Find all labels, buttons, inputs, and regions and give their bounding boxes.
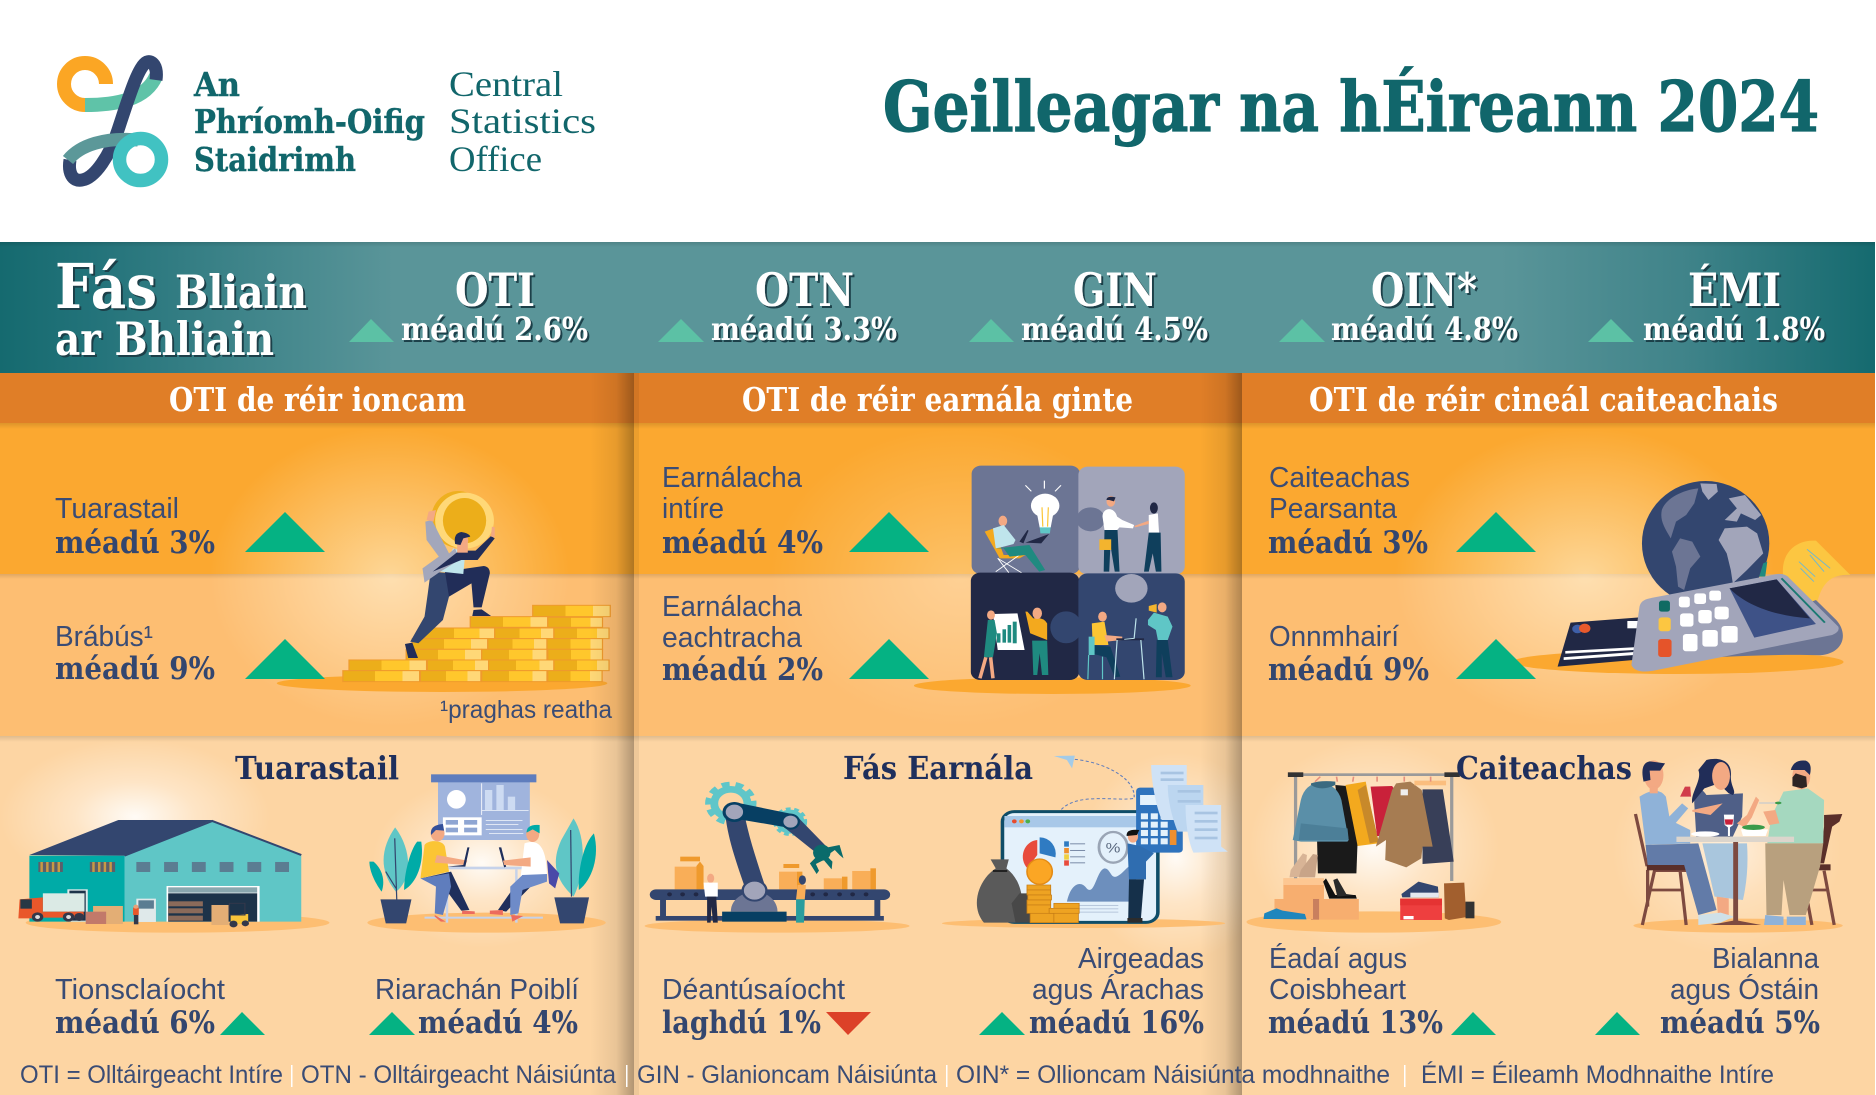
- illustration: man carrying a coin up stacked coins: [277, 491, 610, 692]
- panel: OTI by income: [0, 373, 634, 1095]
- metric: ÉMI: ÉMI: [1688, 262, 1781, 317]
- heading: Fás Bliain ar Bhliain: ar Bhliain: [55, 312, 274, 366]
- footer: abbreviation legend: OIN* = Ollioncam Náisiúnta modhnaithe: [956, 1061, 1390, 1089]
- metric: OTI: méadú 2.6%: [401, 310, 588, 348]
- metric: clothing and footwear: Éadaí agus: [1269, 942, 1407, 975]
- metric: clothing and footwear: méadú 13%: [1268, 1005, 1443, 1041]
- metric: domestic sectors: [662, 466, 929, 554]
- metric: wages: méadú 3%: [55, 525, 215, 561]
- heading: sector growth: Fás Earnála: [843, 749, 1033, 787]
- logo text: Irish name: An: [193, 65, 240, 104]
- metric: personal consumption: [1268, 466, 1536, 554]
- illustration: clothes rail with shoes: [1246, 772, 1501, 933]
- illustration: financial dashboard and coins: [942, 756, 1228, 928]
- logo text: Irish name: Phríomh-Oifig: [194, 102, 425, 141]
- heading: Fás Bliain ar Bhliain: Bliain: [175, 265, 307, 319]
- illustration: globe and card payment terminal: [1513, 481, 1850, 674]
- heading: wages: Tuarastail: [235, 749, 399, 787]
- metric: restaurants and hotels: agus Óstáin: [1670, 973, 1819, 1006]
- shadow toward next column: [1210, 373, 1242, 1095]
- metric: manufacturing: laghdú 1%: [662, 1005, 821, 1041]
- metric: restaurants and hotels: méadú 5%: [1660, 1005, 1820, 1041]
- sub-element: idea bulb: [1025, 481, 1061, 533]
- metric: public administration: méadú 4%: [418, 1005, 578, 1041]
- footer: abbreviation legend: OTN - Olltáirgeacht Náisiúnta: [301, 1061, 616, 1089]
- sub-element: workers: [704, 874, 806, 923]
- metric: GIN: GIN: [1073, 263, 1157, 317]
- metric: domestic sectors: méadú 4%: [662, 525, 823, 561]
- heading: OTI by sector: OTI de réir earnála ginte: [742, 380, 1133, 419]
- metric: clothing and footwear: Coisbheart: [1269, 974, 1406, 1006]
- metric: manufacturing: Déantúsaíocht: [662, 974, 845, 1006]
- illustration: factory warehouse: [18, 820, 329, 933]
- logo text: Irish name: [193, 65, 425, 179]
- metric: finance and insurance: agus Árachas: [1032, 973, 1204, 1006]
- illustration: robot arm and conveyor: [645, 784, 910, 933]
- metric: personal consumption: Pearsanta: [1269, 493, 1398, 525]
- metric: ÉMI: méadú 1.8%: [1643, 310, 1825, 348]
- metric: OIN: méadú 4.8%: [1331, 310, 1518, 348]
- illustration: financial dashboard and coins: %: [1106, 841, 1121, 856]
- shadow toward next column: [601, 373, 634, 1095]
- metric: personal consumption: Caiteachas: [1269, 462, 1410, 494]
- metric: external sectors: méadú 2%: [662, 652, 823, 688]
- footer: abbreviation legend: GIN - Glanioncam Náisiúnta: [637, 1061, 937, 1089]
- footnote: ¹praghas reatha: [440, 696, 612, 724]
- metric: OTI: [349, 263, 588, 348]
- metric: surplus: Brábús¹: [55, 621, 153, 653]
- metric: industry: Tionsclaíocht: [55, 974, 225, 1006]
- metric: finance and insurance: [979, 947, 1204, 1035]
- header: [64, 62, 1819, 180]
- metric: exports: [1268, 624, 1536, 680]
- metric: surplus: [56, 624, 325, 680]
- metric: exports: méadú 9%: [1268, 652, 1429, 688]
- heading: Fás Bliain ar Bhliain: Fás: [55, 250, 157, 323]
- metric: public administration: [369, 978, 579, 1035]
- metric: industry: méadú 6%: [55, 1005, 215, 1041]
- metric: surplus: méadú 9%: [55, 651, 215, 687]
- metric: OTN: [658, 263, 897, 348]
- metric: OIN: [1279, 263, 1518, 348]
- heading: expenditure: Caiteachas: [1456, 749, 1632, 787]
- metric: OTN: méadú 3.3%: [711, 310, 897, 348]
- metric: domestic sectors: intíre: [662, 493, 724, 525]
- footer: abbreviation legend: OTI = Olltáirgeacht Intíre: [20, 1061, 283, 1089]
- sub-element: chairs: [1635, 814, 1842, 925]
- heading: OTI by expenditure: OTI de réir cineál caiteachais: [1309, 380, 1778, 419]
- panel: OTI by sector: [634, 373, 1271, 1095]
- metric: industry: [56, 978, 265, 1035]
- metric: OIN: OIN*: [1371, 263, 1477, 317]
- metric: GIN: [969, 263, 1208, 348]
- metric: OTN: OTN: [755, 263, 854, 317]
- metric: wages: [56, 497, 325, 554]
- logo text: English name: Statistics: [449, 101, 596, 141]
- metric: ÉMI: [1588, 262, 1825, 348]
- metric: external sectors: [662, 594, 929, 680]
- metric: restaurants and hotels: Bialanna: [1712, 943, 1820, 975]
- metric: domestic sectors: Earnálacha: [662, 462, 803, 494]
- illustration: two workers at a table with plants: [367, 774, 606, 933]
- metric: clothing and footwear: [1268, 942, 1496, 1041]
- footer: abbreviation legend: ÉMI = Éileamh Modhnaithe Intíre: [1421, 1060, 1774, 1089]
- illustration: three people dining: [1633, 759, 1843, 933]
- heading: Fás Bliain ar Bhliain: [55, 250, 307, 366]
- metric: exports: Onnmhairí: [1269, 621, 1399, 653]
- metric: external sectors: Earnálacha: [662, 591, 803, 623]
- footer: abbreviation legend: [20, 1060, 1774, 1089]
- heading: OTI by income: OTI de réir ioncam: [169, 380, 466, 419]
- logo text: English name: Office: [449, 139, 542, 179]
- icon: CSO logo: [64, 62, 162, 180]
- metric: manufacturing: [662, 974, 871, 1041]
- logo text: English name: [449, 64, 596, 179]
- metric: finance and insurance: Airgeadas: [1078, 943, 1204, 975]
- metric: OTI: OTI: [455, 263, 535, 317]
- metric: wages: Tuarastail: [55, 493, 179, 525]
- logo text: English name: Central: [449, 64, 563, 104]
- metric: external sectors: eachtracha: [662, 622, 803, 654]
- metric: GIN: méadú 4.5%: [1021, 310, 1208, 348]
- logo text: Irish name: Staidrimh: [194, 140, 356, 179]
- metric: restaurants and hotels: [1595, 947, 1820, 1035]
- illustration: four-piece jigsaw with people: [914, 466, 1191, 694]
- panel: OTI by expenditure: [1242, 373, 1875, 1095]
- metric: personal consumption: méadú 3%: [1268, 525, 1428, 561]
- metric: finance and insurance: méadú 16%: [1029, 1005, 1204, 1041]
- panel: year on year growth band: [0, 242, 1875, 373]
- metric: public administration: Riarachán Poiblí: [375, 974, 579, 1006]
